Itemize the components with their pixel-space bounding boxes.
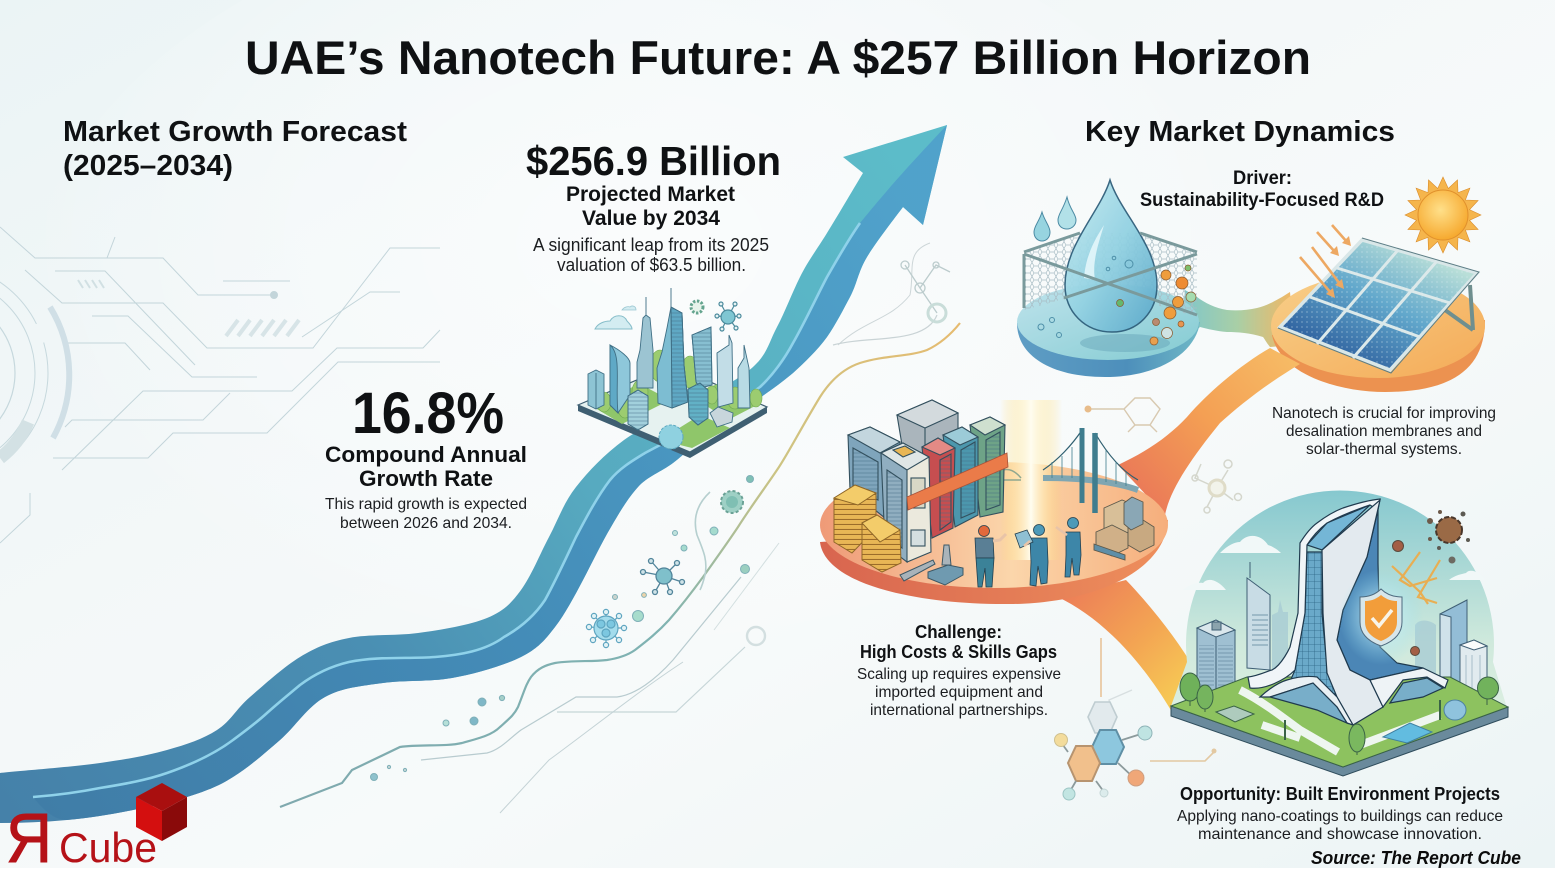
left shell	[1248, 499, 1380, 688]
distant skyline	[1272, 600, 1436, 680]
cardboard boxes	[1094, 497, 1154, 560]
heading: market growth forecast: Market Growth Forecast	[63, 116, 407, 148]
stepped spire tower	[637, 297, 653, 388]
clouds	[1220, 536, 1281, 553]
callout: projected value: Projected Market	[566, 182, 735, 206]
challenge text: international partnerships.	[870, 702, 1048, 719]
left wing	[1260, 676, 1353, 725]
slim glass tower	[717, 335, 733, 407]
nano fountain	[659, 425, 683, 449]
plaza pond and bed	[1383, 723, 1432, 743]
curved tower	[610, 345, 630, 413]
logo cube	[136, 783, 187, 841]
striped right tower	[692, 327, 712, 388]
grey circuit flow lines	[421, 577, 741, 760]
futuristic tower	[1248, 499, 1448, 725]
ribbon down to challenge platform	[1118, 348, 1300, 515]
solar panel stand	[1445, 285, 1473, 330]
gold and teal flow line	[280, 323, 960, 807]
heading: key market dynamics: Key Market Dynamics	[1085, 116, 1395, 148]
shield	[1360, 589, 1402, 646]
driver heading	[1140, 168, 1384, 211]
opportunity text	[1177, 784, 1503, 843]
worker right with wrench	[1056, 518, 1081, 577]
orange barrier band	[907, 453, 1008, 510]
title: UAE’s Nanotech Future: A $257 Billion Horizon	[245, 31, 1311, 84]
right towers	[1440, 600, 1487, 700]
water drop	[1065, 180, 1157, 332]
arrow lower shaded half	[33, 125, 947, 820]
driver description	[1272, 405, 1496, 458]
membrane frame bars	[1024, 233, 1197, 315]
window column	[1285, 552, 1337, 703]
short left tower	[588, 370, 604, 409]
driver description: desalination membranes and	[1286, 423, 1482, 440]
callout: CAGR: Growth Rate	[359, 466, 493, 491]
server racks	[848, 400, 1005, 562]
sky circle	[1171, 490, 1507, 767]
callout: projected value: A significant leap from its 2025	[533, 235, 769, 255]
right wing	[1370, 668, 1448, 707]
gold stacks	[834, 485, 901, 572]
rack white	[881, 443, 931, 562]
opportunity text: Applying nano-coatings to buildings can reduce	[1177, 808, 1503, 825]
challenge text: imported equipment and	[875, 684, 1043, 701]
towers	[588, 288, 750, 430]
challenge text: Scaling up requires expensive	[857, 666, 1061, 683]
opportunity text: Opportunity: Built Environment Projects	[1180, 784, 1500, 804]
challenge disc side	[820, 520, 1168, 604]
callout: CAGR: 16.8%	[352, 381, 504, 446]
solar disc side	[1272, 320, 1485, 392]
molecule: large hexagon chain	[1054, 638, 1216, 800]
glass crown	[1307, 505, 1370, 550]
worker left	[975, 526, 1006, 587]
driver description: solar-thermal systems.	[1306, 441, 1462, 458]
dark blue coated facade	[1337, 510, 1423, 680]
virus particle green	[721, 491, 743, 513]
water disc top	[1017, 284, 1199, 360]
challenge platform	[820, 400, 1195, 712]
facade coating glow	[1339, 569, 1423, 665]
driver: solar platform	[1118, 177, 1485, 515]
callout: CAGR	[325, 381, 527, 532]
light beam	[1000, 400, 1062, 560]
small droplets	[1034, 212, 1050, 241]
front white tower	[628, 390, 648, 430]
arrow highlight line	[33, 223, 860, 797]
membrane mesh	[1024, 233, 1197, 317]
challenge text	[857, 622, 1061, 719]
logo: RCube: Cube	[59, 824, 157, 871]
soft central glow	[20, 0, 1260, 760]
callout: CAGR: Compound Annual	[325, 442, 527, 467]
rack red	[922, 438, 955, 538]
contaminant particles	[1116, 265, 1196, 345]
molecule	[715, 302, 741, 331]
rack teal	[943, 427, 978, 527]
growth arrow	[0, 125, 947, 823]
challenge text: High Costs & Skills Gaps	[860, 642, 1057, 662]
ground slab	[1171, 706, 1508, 776]
driver heading: Sustainability-Focused R&D	[1140, 190, 1384, 211]
heading: market growth forecast: (2025–2034)	[63, 150, 233, 182]
water bubbles	[1038, 256, 1133, 338]
callout: projected value	[526, 138, 781, 275]
molecule: star node	[1192, 460, 1242, 513]
logo: RCube	[6, 783, 187, 877]
callout: projected value: $256.9 Billion	[526, 138, 781, 184]
challenge disc top	[820, 462, 1168, 588]
rack green	[970, 417, 1005, 517]
callout: CAGR: This rapid growth is expected	[325, 496, 527, 513]
floating dots	[370, 476, 754, 780]
nano shrub	[1444, 700, 1466, 720]
low grey block	[710, 407, 733, 427]
bottom white strip	[0, 868, 1555, 883]
neck connecting water and solar	[1180, 290, 1295, 347]
deflected arrows	[1392, 552, 1440, 604]
front teal tower	[688, 383, 708, 425]
left towers	[1197, 562, 1270, 700]
ribbon toward opportunity	[1058, 580, 1195, 712]
driver: water platform	[1017, 180, 1295, 377]
callout: projected value: valuation of $63.5 billion.	[557, 255, 746, 275]
molecule: hexagon upper	[1084, 398, 1160, 432]
driver heading: Driver:	[1233, 168, 1292, 189]
decorative flow lines and nano particles	[280, 243, 960, 813]
water disc side	[1017, 322, 1200, 377]
rack blue	[848, 427, 900, 530]
trees	[597, 350, 762, 418]
solar disc top	[1271, 274, 1485, 378]
walking paths	[1240, 690, 1440, 752]
pollutant particles	[1392, 510, 1470, 656]
right white panel	[1322, 500, 1383, 725]
lamp posts	[1285, 700, 1440, 740]
suspension bridge	[1003, 428, 1138, 513]
heading: market growth forecast	[63, 116, 407, 182]
far right tower	[738, 345, 750, 408]
city base	[578, 405, 767, 458]
source note: Source: The Report Cube	[1311, 848, 1521, 868]
panel grid	[1310, 250, 1450, 358]
hollow ring marker	[747, 627, 765, 645]
logo wordmark: Я	[6, 799, 52, 877]
tool and machine	[900, 545, 963, 585]
circuit line pattern	[0, 227, 440, 543]
callout: projected value: Value by 2034	[582, 206, 720, 230]
virus particle small teal	[640, 558, 684, 594]
tall central tower	[657, 288, 688, 408]
upper-right molecule	[901, 261, 950, 322]
gear	[691, 301, 703, 313]
virus particle blue cluster	[586, 609, 627, 648]
opportunity text: maintenance and showcase innovation.	[1198, 826, 1482, 843]
trees	[1180, 673, 1498, 755]
worker centre with tablet	[1015, 524, 1048, 586]
rack grey	[897, 400, 958, 460]
solar rays	[1300, 225, 1351, 298]
opportunity: smart building scene	[1171, 490, 1508, 776]
challenge text: Challenge:	[915, 622, 1002, 642]
concentric tech rings	[0, 263, 69, 483]
solar panel	[1280, 240, 1477, 370]
driver description: Nanotech is crucial for improving	[1272, 405, 1496, 422]
sun	[1405, 177, 1481, 253]
cloud	[595, 316, 632, 329]
arrow band body	[0, 125, 947, 823]
isometric city illustration	[578, 288, 767, 458]
callout: CAGR: between 2026 and 2034.	[340, 515, 512, 532]
